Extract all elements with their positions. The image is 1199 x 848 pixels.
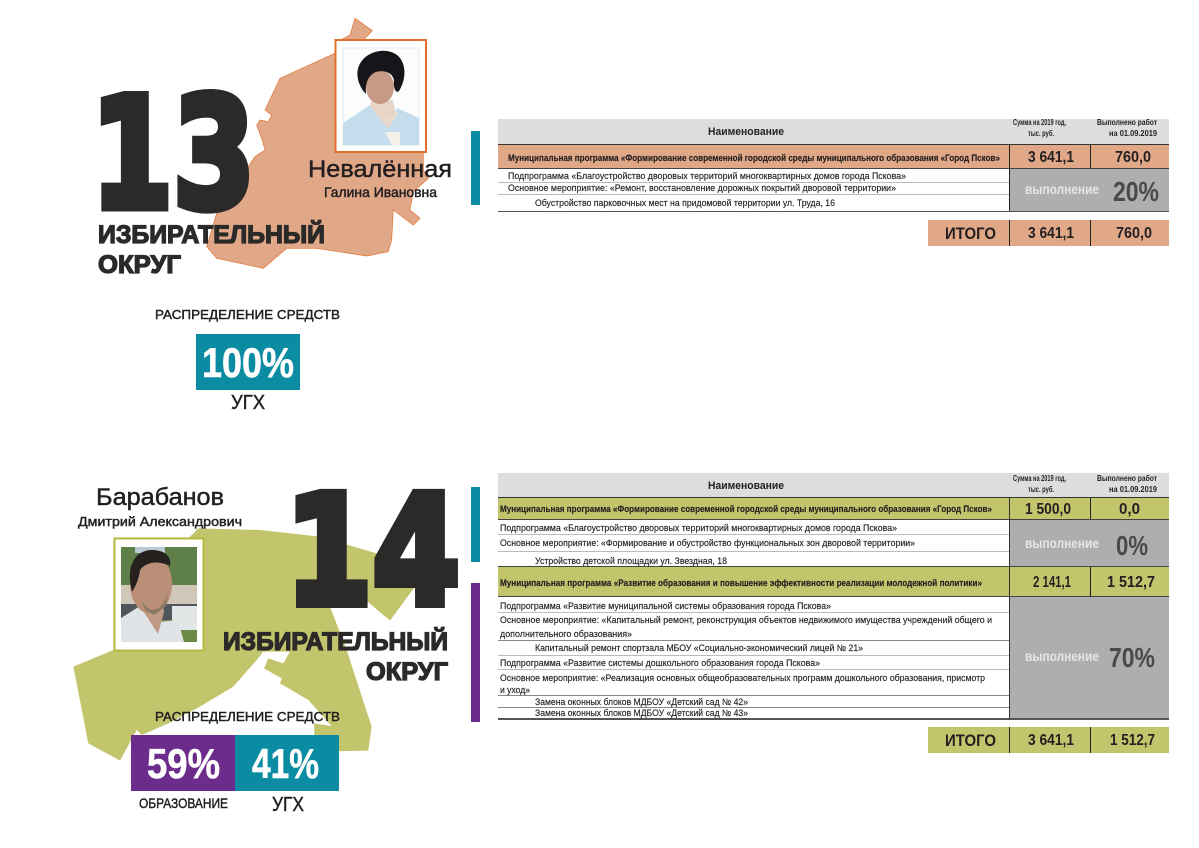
table: district 14: Муниципальная программа «Развитие образования и повышение эффективности реализации молодежной политики» bbox=[500, 578, 982, 588]
name: Barabanov: Дмитрий Александрович bbox=[78, 514, 242, 529]
funds distribution: 59% bbox=[147, 740, 220, 787]
table: district 14: тыс. руб. bbox=[1028, 484, 1054, 494]
table: district 14: выполнение bbox=[1025, 535, 1099, 551]
table: district 14: Устройство детской площадки ул. Звездная, 18 bbox=[535, 556, 727, 566]
table: district 14: Основное мероприятие: «Реализация основных общеобразовательных программ дошкольного образования, присмотр bbox=[500, 673, 985, 683]
table: district 14: дополнительного образования» bbox=[500, 629, 632, 639]
table: district 14: Замена оконных блоков МДБОУ «Детский сад № 42» bbox=[535, 697, 748, 707]
district 14 panel bbox=[73, 464, 1169, 816]
table: district 14: Подпрограмма «Развитие муниципальной системы образования города Пскова» bbox=[500, 601, 831, 611]
side bar: teal bbox=[471, 487, 480, 562]
table: district 14: Замена оконных блоков МДБОУ «Детский сад № 43» bbox=[535, 708, 748, 718]
funds distribution bbox=[155, 307, 340, 414]
district 13 panel bbox=[91, 18, 1169, 414]
map: district 13 bbox=[207, 18, 428, 268]
table: district 14: выполнение bbox=[1025, 648, 1099, 664]
table: district 14: Подпрограмма «Развитие системы дошкольного образования города Пскова» bbox=[500, 658, 820, 668]
table: district 13: тыс. руб. bbox=[1028, 128, 1054, 138]
name: Barabanov bbox=[78, 484, 242, 529]
number 13: 13 bbox=[91, 66, 255, 244]
funds distribution: 100% bbox=[202, 339, 294, 386]
table: district 13: ИТОГО bbox=[945, 224, 996, 243]
table: district 13: Обустройство парковочных мест на придомовой территории ул. Труда, 16 bbox=[535, 198, 835, 208]
table: district 14: 2 141,1 bbox=[1033, 574, 1071, 591]
heading: district label bbox=[98, 219, 325, 279]
table: district 13 bbox=[498, 117, 1169, 246]
table: district 13: Подпрограмма «Благоустройство дворовых территорий многоквартирных домов города Пскова» bbox=[508, 171, 906, 181]
funds distribution bbox=[131, 709, 340, 816]
table: district 13: Выполнено работ bbox=[1097, 117, 1157, 127]
funds distribution: РАСПРЕДЕЛЕНИЕ СРЕДСТВ bbox=[155, 709, 340, 724]
table: district 14: Наименование bbox=[708, 480, 784, 492]
portrait: Nevalyonnaya bbox=[336, 40, 426, 152]
table: district 13: на 01.09.2019 bbox=[1109, 128, 1157, 138]
table: district 14: Основное мероприятие: «Формирование и обустройство функциональных зон дворовой территории» bbox=[500, 538, 915, 548]
side bar: purple bbox=[471, 583, 480, 722]
table: district 13: 760,0 bbox=[1115, 149, 1151, 166]
side bar: teal bbox=[471, 131, 480, 205]
heading: district label: ОКРУГ bbox=[366, 658, 448, 686]
table: district 13: Наименование bbox=[708, 126, 784, 138]
table: district 14: ИТОГО bbox=[945, 731, 996, 750]
map: district 14 bbox=[73, 528, 415, 761]
table: district 14: Сумма на 2019 год, bbox=[1013, 473, 1066, 483]
table: district 13: 3 641,1 bbox=[1028, 149, 1074, 166]
table: district 14: 1 512,7 bbox=[1107, 574, 1155, 591]
table: district 13: 760,0 bbox=[1116, 225, 1152, 242]
heading: district label: ИЗБИРАТЕЛЬНЫЙ bbox=[98, 219, 325, 249]
portrait: Barabanov bbox=[114, 538, 204, 650]
heading: district label: ОКРУГ bbox=[98, 251, 181, 279]
number 14: 14 bbox=[285, 464, 460, 640]
funds distribution: 41% bbox=[252, 740, 319, 787]
table: district 14: Основное мероприятие: «Капитальный ремонт, реконструкция объектов недвижимого имущества учреждений общего и bbox=[500, 615, 992, 625]
funds distribution: УГХ bbox=[231, 392, 265, 414]
table: district 14: Муниципальная программа «Формирование современной городской среды муниципального образования «Город Псков» bbox=[500, 504, 992, 514]
name: Nevalyonnaya bbox=[308, 156, 452, 200]
heading: district label bbox=[223, 626, 448, 686]
table: district 14: Капитальный ремонт спортзала МБОУ «Социально-экономический лицей № 21» bbox=[535, 643, 863, 653]
funds distribution: РАСПРЕДЕЛЕНИЕ СРЕДСТВ bbox=[155, 307, 340, 322]
name: Nevalyonnaya: Невалённая bbox=[308, 156, 452, 183]
table: district 13: 3 641,1 bbox=[1028, 225, 1074, 242]
table: district 14: 0% bbox=[1116, 530, 1148, 561]
table: district 13: Муниципальная программа «Формирование современной городской среды муниципального образования «Город Псков» bbox=[508, 153, 1000, 163]
table: district 14: 70% bbox=[1109, 642, 1155, 673]
funds distribution: ОБРАЗОВАНИЕ bbox=[139, 795, 228, 811]
heading: district label: ИЗБИРАТЕЛЬНЫЙ bbox=[223, 626, 448, 656]
table: district 14 bbox=[498, 473, 1169, 753]
table: district 14: и уход» bbox=[500, 685, 530, 695]
table: district 13: 20% bbox=[1113, 176, 1159, 207]
table: district 13: Сумма на 2019 год, bbox=[1013, 117, 1066, 127]
table: district 14: Подпрограмма «Благоустройство дворовых территорий многоквартирных домов города Пскова» bbox=[500, 523, 897, 533]
funds distribution: УГХ bbox=[272, 794, 304, 816]
table: district 14: 1 500,0 bbox=[1025, 501, 1071, 518]
table: district 13: выполнение bbox=[1025, 181, 1099, 197]
table: district 14: Выполнено работ bbox=[1097, 473, 1157, 483]
table: district 14: 0,0 bbox=[1119, 501, 1140, 518]
table: district 14: на 01.09.2019 bbox=[1109, 484, 1157, 494]
table: district 13: Основное мероприятие: «Ремонт, восстановление дорожных покрытий дворовой территории» bbox=[508, 183, 896, 193]
name: Nevalyonnaya: Галина Ивановна bbox=[324, 184, 437, 200]
table: district 14: 1 512,7 bbox=[1110, 732, 1155, 749]
table: district 14: 3 641,1 bbox=[1028, 732, 1074, 749]
name: Barabanov: Барабанов bbox=[96, 484, 224, 511]
